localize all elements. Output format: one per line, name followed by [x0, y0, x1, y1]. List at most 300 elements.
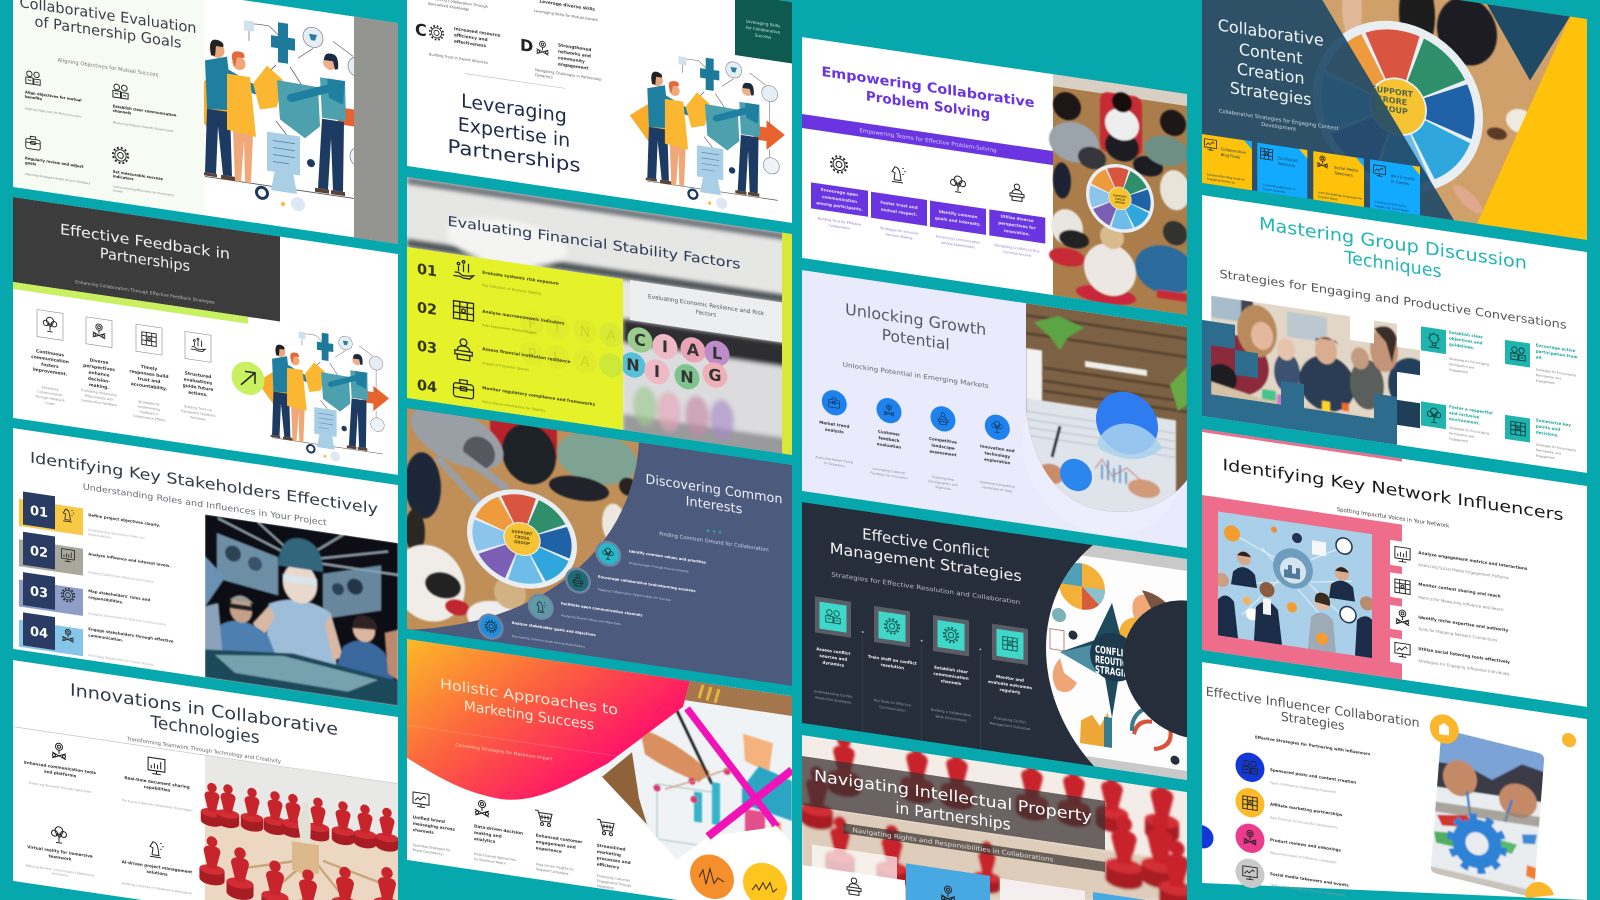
numbered factors: Key Indicators of Financial Stability	[482, 283, 541, 296]
letter beads photo: A	[687, 339, 700, 360]
item 03: Engaging Stakeholders for Effective Communication	[88, 611, 166, 627]
slide: Leveraging Expertise in Partnerships	[407, 0, 792, 223]
technology items: Enhancing Teamwork Through Digital Tools	[29, 781, 91, 794]
content cards: Greater Reach	[1318, 195, 1339, 202]
faint beads behind panel: A	[580, 354, 590, 371]
letter beads photo: N	[626, 355, 640, 375]
letter beads photo: I	[654, 362, 660, 381]
faint beads behind panel: P	[528, 346, 536, 363]
technology items: solutions	[146, 869, 168, 877]
title: Identifying Key Network Influencers	[1222, 455, 1564, 524]
content cards: Expert Expertise	[1263, 187, 1286, 194]
strategy columns: Establish clear	[934, 665, 968, 675]
subtitle: Aligning Objectives for Mutual Success	[58, 58, 159, 79]
four technique items: Engagement	[1536, 453, 1556, 460]
technology items	[24, 738, 193, 896]
subtitle: Strategies for Engaging and Productive Conversations	[1220, 267, 1567, 332]
faint beads behind panel: A	[606, 328, 616, 345]
strategy columns: communication	[933, 671, 969, 681]
title	[1259, 215, 1527, 295]
interest list: Analyzing Shared Values and Objectives	[561, 613, 621, 626]
marketing items: Streamlined	[597, 843, 626, 852]
title: Creation	[1237, 59, 1305, 88]
subtitle: Spotting Impactful Voices in Your Network	[1337, 507, 1450, 530]
title: of Partnership Goals	[35, 13, 182, 52]
feedback columns: Collaborative Efforts	[133, 414, 166, 423]
title: Marketing Success	[464, 698, 594, 734]
title	[830, 520, 1022, 586]
four technique items: Summarize key	[1536, 417, 1571, 428]
feedback columns: Processes	[190, 415, 206, 422]
influencer list: Identify niche expertise and authority	[1418, 615, 1509, 633]
title: Collaborative	[1218, 15, 1324, 50]
feedback columns	[31, 309, 216, 430]
growth items: Leveraging Customer	[872, 466, 906, 475]
subtitle band: Navigating Rights and Responsibilities in Collaborations	[853, 827, 1054, 864]
item 01: 01	[30, 504, 48, 521]
item 03: responsibilities.	[88, 594, 124, 605]
marketing items	[413, 790, 631, 893]
strategy list: Affiliate marketing partnerships	[1270, 802, 1343, 817]
content cards: Joint Storytelling Campaigns for	[1318, 190, 1363, 201]
title: Innovations in Collaborative	[70, 681, 338, 740]
influencer list: Metrics for Measuring Influence and Reach	[1418, 595, 1504, 612]
feedback columns: improvement.	[33, 367, 68, 378]
content cards: Co-Hosted	[1278, 155, 1297, 163]
goal items: Align objectives for mutual	[25, 90, 81, 103]
title: Effective Conflict	[862, 525, 989, 562]
interest list	[478, 521, 706, 672]
expertise items: Building Trust in Expert Alliances	[429, 52, 488, 65]
title	[814, 767, 1092, 846]
four technique items: Foster a respectful	[1449, 404, 1493, 416]
four technique items: Strategies for Encouraging	[1449, 357, 1489, 366]
white icon tabs	[1390, 540, 1414, 665]
strategy columns: Resolution Strategies	[815, 695, 852, 705]
strategy columns: Management Outcomes	[990, 721, 1031, 731]
faint beads behind panel	[520, 310, 623, 379]
dark mosaic block	[1397, 400, 1420, 428]
marketing items: efficiency	[597, 861, 619, 870]
expertise items: D	[520, 35, 533, 56]
strategy columns: evaluate outcomes	[988, 679, 1032, 690]
technology items: capabilities	[144, 784, 171, 793]
feedback columns: Constructive Feedback	[81, 398, 117, 407]
marketing items: Enhancing Customer	[597, 874, 630, 883]
growth items: Customer	[878, 429, 900, 437]
illustration: handshake team	[262, 332, 389, 462]
pink block	[1202, 495, 1402, 680]
subtitle: Transforming Teamwork Through Technology and Creativity	[126, 736, 281, 765]
marketing items: Engagement Through	[597, 879, 631, 888]
content cards	[1202, 134, 1420, 216]
technology items: teamwork	[48, 853, 72, 862]
content cards: Webinars	[1278, 161, 1295, 168]
numbered list	[19, 491, 174, 670]
goal items: benefits	[25, 95, 43, 101]
four action columns	[811, 152, 1045, 260]
title: Effective Feedback in	[60, 221, 230, 263]
four technique items: Participation and	[1536, 448, 1561, 456]
growth items: Assessing Competitive	[980, 480, 1015, 489]
four technique items: Strategies for Encouraging	[1536, 442, 1576, 452]
numbered factors: Assess financial institution resilience	[482, 346, 571, 364]
strategy columns	[814, 596, 1032, 757]
strategy list: Social media takeovers and events	[1270, 871, 1349, 888]
four technique items: Encourage active	[1536, 342, 1575, 353]
round illustration	[1042, 536, 1192, 785]
photo: support circle	[393, 388, 647, 669]
slide: Identifying Key Stakeholders Effectively	[13, 428, 398, 706]
four action columns: innovation.	[1004, 228, 1030, 237]
expertise items: engagement	[558, 61, 588, 72]
dark header panel	[13, 197, 280, 322]
four action columns: Common Ground	[1003, 250, 1031, 258]
round illustration: REOUTION	[1095, 654, 1133, 671]
title: in Partnerships	[895, 799, 1011, 834]
expertise items: Leveraging Skills for Mutual Growth	[534, 9, 598, 22]
feedback columns: accountability.	[131, 381, 167, 392]
expertise items: C	[415, 20, 427, 40]
round illustration: STRAGIES	[1095, 664, 1133, 681]
blue half circle	[1190, 824, 1214, 850]
four action columns: Collaboration	[829, 223, 850, 231]
content cards: or Guides	[1391, 178, 1409, 186]
faint beads behind panel: L	[553, 350, 561, 367]
technology items: Reducing Barriers: Cross-Industry Collaborative	[26, 863, 94, 878]
growth items: Market trend	[819, 420, 849, 429]
item 01: Define project objectives clearly.	[88, 512, 161, 528]
divider	[13, 727, 398, 784]
pink top strip	[1202, 429, 1402, 462]
feedback columns: perspectives	[83, 363, 115, 373]
letter beads photo: I	[662, 337, 668, 357]
lime stripe	[13, 282, 248, 324]
dark circle overlay	[1123, 591, 1260, 748]
marketing items: Unified brand	[413, 814, 445, 824]
item 01	[19, 492, 160, 539]
four technique items: Engagement	[1536, 378, 1556, 385]
interest list: Identify common values and priorities	[629, 549, 706, 565]
four action columns: Utilize diverse	[1000, 213, 1034, 223]
title: Interests	[686, 494, 743, 518]
slide: Empowering Collaborative Problem Solving	[802, 37, 1195, 317]
support circle wheel: GROUP	[514, 539, 530, 546]
marketing items: messaging across	[413, 821, 455, 832]
title: Identifying Key Stakeholders Effectively	[30, 449, 378, 518]
influencer list: Analyze engagement metrics and interactions	[1418, 550, 1528, 571]
strategy list: Best Practices for Successful Collaborations	[1270, 816, 1338, 830]
photo: charts on desk	[597, 667, 797, 879]
interest list: Mapping Collaborative Opportunities for Success	[598, 587, 671, 602]
item 04: Prioritizing Stakeholders for Project Success	[88, 653, 154, 667]
expertise items: Dynamics	[535, 73, 553, 80]
blurred photo of pawns	[801, 722, 1195, 900]
title: Empowering Collaborative	[821, 64, 1034, 111]
marketing items: Seamless Strategies for	[413, 843, 451, 852]
strategy columns: Building a Collaborative	[931, 708, 971, 718]
four technique items: Engagement	[1449, 368, 1469, 374]
goal items: Aligning Objectives for Mutual Success	[25, 106, 82, 119]
title	[450, 93, 580, 173]
marketing items: Enhanced customer	[536, 833, 582, 844]
title	[1218, 15, 1324, 111]
marketing items: Data-Driven Insights for	[536, 862, 574, 872]
growth items: Innovation and	[980, 443, 1015, 453]
numbered factors: 01	[417, 262, 437, 280]
feedback columns: actions.	[188, 390, 208, 398]
magenta cross	[687, 708, 792, 849]
slide: Effective Conflict Management Strategies	[802, 500, 1260, 795]
technology items: Real-time document sharing	[124, 775, 190, 790]
faint beads behind panel: I	[555, 320, 559, 336]
left panel	[13, 0, 204, 215]
wheel centre label: CRORE	[1377, 94, 1407, 107]
item 04	[19, 612, 174, 670]
marketing items: Integration	[597, 884, 614, 890]
letter beads photo: C	[634, 330, 646, 350]
title: Holistic Approaches to	[440, 677, 618, 719]
purple band with subtitle: Empowering Teams for Effective Problem-Solving	[859, 128, 997, 154]
interest list: Facilitate open communication channels	[561, 602, 643, 618]
illustration: handshake team	[630, 56, 785, 209]
photo: group circle	[1049, 74, 1195, 317]
expertise items: efficiency and	[454, 32, 488, 43]
content cards: Joint E-books	[1391, 173, 1415, 182]
item 01: Responsibilities	[88, 532, 112, 540]
growth items: Exploring New	[932, 475, 954, 482]
feedback columns: communication	[31, 354, 69, 365]
slide: Mastering Group Discussion Techniques	[1202, 195, 1587, 473]
title: Mastering Group Discussion	[1259, 215, 1527, 274]
numbered factors: Evaluate systemic risk exposure	[482, 270, 559, 286]
feedback columns: Enhancing	[42, 385, 58, 392]
growth items: assessment	[929, 448, 957, 457]
feedback columns: Implementing	[138, 405, 160, 412]
feedback columns: Through Feedback	[34, 394, 65, 403]
pie	[1059, 560, 1105, 613]
feedback columns: Building Trust via	[184, 404, 212, 412]
numbered factors: Monitor regulatory compliance and frameworks	[482, 385, 596, 407]
item 02	[19, 532, 170, 583]
numbered factors: 03	[417, 339, 437, 357]
content cards: Takeovers	[1333, 170, 1353, 178]
goal items: goals	[25, 161, 37, 167]
marketing items: marketing	[597, 849, 621, 857]
strategy columns: Evaluating Conflict	[994, 716, 1026, 725]
title: Potential	[882, 326, 950, 354]
four action columns: Navigating Conflicts to Find	[994, 243, 1040, 254]
four technique items: Strategies for Encouraging	[1449, 426, 1489, 435]
expertise items: Leverage diverse skills	[539, 0, 595, 13]
gradient header shape	[407, 639, 712, 830]
feedback columns: making.	[89, 382, 109, 391]
title	[845, 300, 986, 359]
info box	[630, 280, 782, 342]
interest list: Discovering Common Goals Among Stakeholders	[512, 634, 585, 649]
subtitle: Understanding Roles and Influences in Your Project	[83, 481, 327, 528]
growth items: evaluation	[877, 441, 901, 450]
feedback columns: fosters	[41, 362, 59, 370]
yellow corner arc	[1526, 880, 1554, 900]
yellow dot	[1562, 732, 1576, 748]
four technique items: Participation and	[1449, 362, 1474, 370]
goal items: Adjusting Strategies Based on Joint Feedback	[25, 172, 91, 186]
bottom cards	[802, 843, 1187, 900]
feedback columns: evaluations	[184, 376, 213, 387]
four action columns: Identify common	[939, 209, 977, 219]
title: Discovering Common	[646, 472, 782, 508]
numbered factors: Impact of Economic Shocks	[482, 361, 529, 372]
title: Strategies	[1230, 78, 1312, 109]
content cards: Engaging Audiences	[1207, 177, 1236, 185]
feedback columns: Evaluating Partnership	[81, 388, 117, 397]
numbered factors: 04	[417, 378, 437, 396]
marketing items: experience	[536, 845, 562, 854]
goal items: Regularly review and adjust	[25, 156, 83, 169]
slide: Collaborative Content Creation Strategies	[1202, 0, 1587, 241]
subtitle: Development	[1261, 122, 1296, 133]
slide: Innovations in Collaborative Technologies	[13, 660, 400, 900]
goal items: indicators	[113, 174, 134, 181]
title: Strategies	[1281, 709, 1345, 733]
title: Expertise in	[458, 113, 570, 152]
title: Effective Influencer Collaboration	[1206, 684, 1420, 730]
strategy columns: Work Environment	[935, 714, 967, 723]
marketing items: analytics	[474, 836, 496, 844]
influencer list	[1395, 546, 1528, 679]
expertise items: effectiveness	[454, 39, 487, 49]
marketing items: for Maximum Reach	[474, 857, 506, 866]
technology items: Fostering Creativity in Collaborative Workspaces	[122, 881, 193, 896]
numbered factors: Risk Assessment Methodologies	[482, 323, 537, 335]
growth items: Segments	[935, 485, 951, 491]
goal items: Establish clear communication	[113, 104, 176, 118]
support circle wheel: SUPPORT	[512, 528, 532, 537]
content cards: Creating Shared Value:	[1375, 200, 1407, 208]
numbered factors: Analyze macroeconomic indicators	[482, 309, 565, 326]
expertise items: Specialized Knowledge	[428, 2, 470, 12]
strategy list: Sponsored posts and content creation	[1270, 767, 1356, 785]
slide: Holistic Approaches to Marketing Success	[407, 639, 797, 900]
item 03	[19, 571, 166, 628]
green tag: Leveraging Skills	[746, 18, 780, 29]
technology items: and platforms	[44, 769, 77, 778]
slide: Identifying Key Network Influencers	[1202, 429, 1587, 707]
title	[822, 64, 1034, 129]
four technique items: environment.	[1449, 416, 1480, 426]
four action columns: among participants.	[816, 200, 863, 212]
four action columns: Strategies for Inclusive	[880, 226, 918, 236]
photo: desk with charts	[1026, 303, 1191, 528]
growth items: landscape	[931, 442, 955, 451]
strategy columns: dynamics	[822, 660, 845, 668]
strategy columns: channels	[941, 678, 962, 686]
wheel centre label: GROUP	[1376, 103, 1408, 116]
four technique items: all.	[1536, 354, 1543, 360]
interest list: Analyze stakeholder goals and objectives	[512, 621, 596, 637]
four technique items: Participation and	[1536, 373, 1561, 381]
influencer list: Utilize social listening tools effectively	[1418, 646, 1510, 665]
influencer list: Tools for Mapping Network Connections	[1417, 626, 1497, 643]
four action columns: Decision-Making	[886, 232, 912, 240]
icon: lime arrow badge	[232, 362, 264, 395]
influencer list: Strategies for Engaging Influential Individuals	[1418, 658, 1510, 677]
title: Technologies	[149, 712, 260, 748]
growth items: exploration	[984, 457, 1011, 465]
dark blue overlay	[1202, 0, 1454, 220]
strategy list: Types of Influencer Partnerships Explained	[1269, 780, 1336, 794]
four technique items: Participation and	[1449, 431, 1474, 439]
interest list: Encourage collaborative brainstorming sessions	[598, 575, 696, 593]
rounded photo: hands assembling gears	[1427, 723, 1552, 900]
slide: Evaluating Financial Stability Factors	[407, 177, 793, 459]
growth items: Feedback for Innovation	[870, 471, 908, 480]
goal items: channels	[113, 109, 132, 116]
feedback columns: trust and	[138, 376, 160, 385]
feedback columns: Structured	[185, 371, 211, 380]
goal items	[25, 70, 177, 202]
feedback columns: responses build	[129, 368, 169, 380]
slide: Effective Feedback in Partnerships	[13, 197, 398, 475]
compass	[1060, 595, 1147, 723]
strategy columns: Assess conflict	[816, 646, 850, 656]
growth items: analysis	[825, 427, 844, 435]
sketch circles	[690, 851, 787, 900]
item 04: communication.	[88, 632, 124, 643]
slide: Navigating Intellectual Property in Partnerships	[801, 722, 1195, 900]
photo: group circle: GROUP	[1115, 200, 1125, 205]
faint beads behind panel: F	[528, 316, 536, 333]
slide: Discovering Common Interests	[393, 388, 792, 690]
subtitle: Collaborative Strategies for Engaging Content	[1219, 109, 1339, 132]
four technique items: Engagement	[1449, 437, 1469, 443]
feedback columns: Transparent Feedback	[179, 409, 216, 418]
title: Partnerships	[100, 245, 190, 275]
feedback columns: Continuous	[36, 349, 64, 359]
four technique items: and inclusive	[1449, 410, 1480, 420]
wheel centre label: SUPPORT	[1371, 84, 1413, 99]
mosaic base	[1202, 320, 1397, 445]
growth items: Analyzing Market Trends	[815, 455, 853, 465]
divider	[407, 725, 617, 756]
content cards: Collaborative	[1221, 146, 1246, 155]
round illustration: CONFLICT	[1095, 644, 1133, 661]
title	[62, 224, 229, 272]
item 04: 04	[30, 624, 48, 642]
illustration: handshake team	[204, 20, 354, 212]
subtitle: Finding Common Ground for Collaboration	[659, 531, 769, 554]
yellow corner	[1477, 3, 1587, 240]
item 02: Analyze influence and interest levels.	[88, 551, 171, 568]
info box: Factors	[696, 310, 716, 319]
item 03: Map stakeholders' roles and	[88, 588, 150, 602]
strategy columns: Communication	[879, 705, 906, 713]
grey side band	[354, 16, 398, 244]
marketing items: processes and	[597, 855, 631, 865]
expertise items: Increased resource	[454, 27, 500, 39]
photo: red pawns and leader	[199, 755, 400, 900]
title	[440, 677, 618, 737]
four action columns: Enhancing Communication	[936, 234, 980, 245]
growth items: Demographics and	[928, 479, 958, 487]
green tag: Success	[755, 32, 771, 40]
dots	[707, 529, 721, 534]
growth items: for Expansion	[824, 461, 845, 468]
technology items: Innovations	[52, 871, 69, 878]
strategy columns: Train staff on conflict	[868, 654, 917, 666]
feedback columns: decision-	[88, 376, 110, 385]
